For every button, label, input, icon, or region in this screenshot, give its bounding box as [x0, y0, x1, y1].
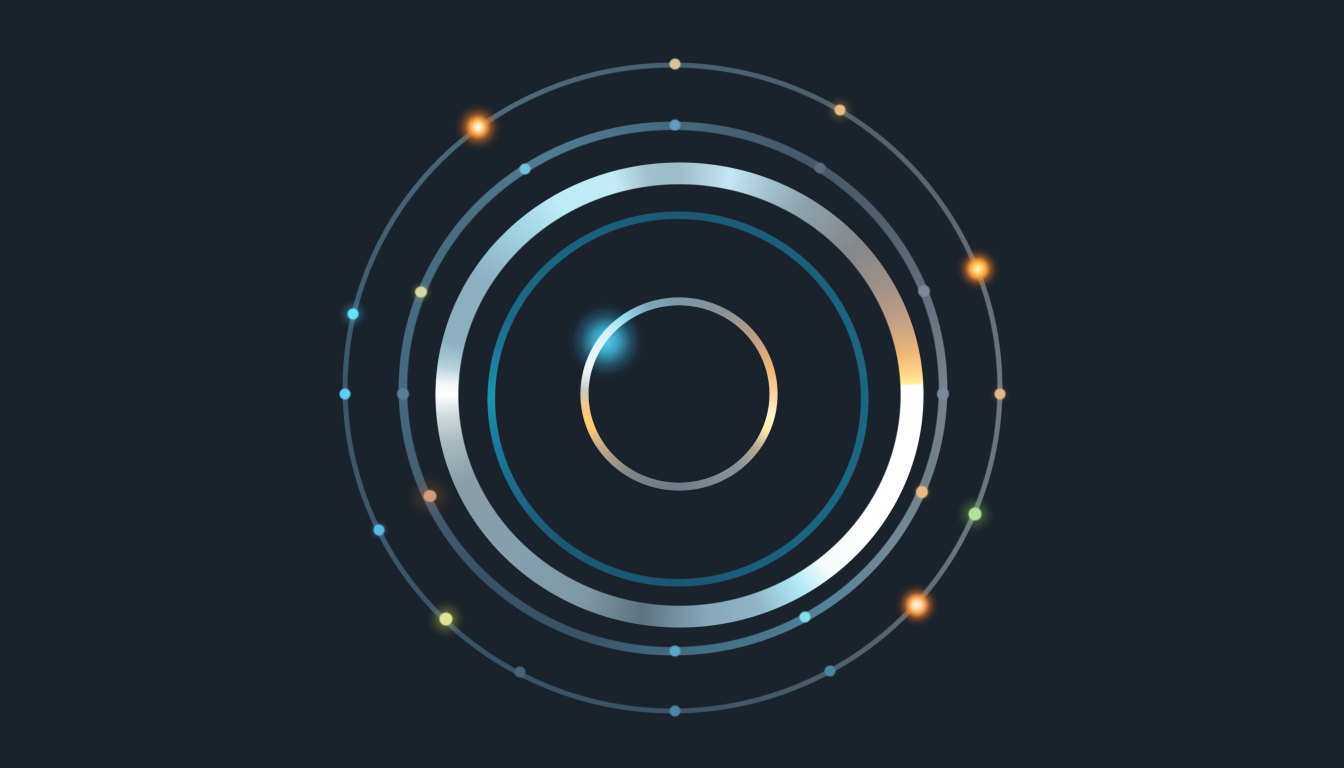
- ring: second orbit: [398, 120, 948, 656]
- node: bottom right blue: [824, 666, 836, 676]
- node: left slate blue: [396, 388, 408, 400]
- node: lower left yellow: [440, 612, 452, 626]
- node: top tan: [670, 58, 680, 70]
- node: right grey: [937, 388, 949, 400]
- ring: inner luminous ring: [580, 297, 778, 491]
- node: upper right tan with glow: [834, 104, 846, 116]
- node: right lower green: [968, 508, 982, 520]
- ring: teal band: [487, 211, 869, 587]
- node: left lower cyan: [374, 524, 384, 536]
- node: bottom left slate: [514, 666, 526, 678]
- node: upper right slate: [814, 162, 826, 174]
- glow: cyan flare behind inner ring: [566, 301, 646, 381]
- node: lower left peach with glow: [423, 490, 436, 502]
- node: left upper bright cyan: [348, 308, 358, 320]
- ring: outer orbit: [342, 62, 1003, 714]
- ring: thick metallic band: [435, 162, 924, 628]
- node: left upper pale yellow: [415, 286, 427, 297]
- node: top blue: [670, 120, 680, 130]
- node: right tan: [994, 388, 1006, 400]
- node: upper left aqua: [520, 163, 530, 174]
- node: lower right orange flare: [895, 583, 939, 627]
- node: right lower tan: [916, 486, 928, 498]
- node: left cyan: [339, 388, 350, 400]
- node: lower right aqua: [800, 612, 810, 622]
- page background: [338, 58, 1008, 717]
- node: right upper orange flare: [956, 247, 1000, 291]
- node: bottom blue: [670, 645, 680, 656]
- node: bottom blue: [670, 706, 680, 716]
- node: right upper grey: [918, 285, 930, 297]
- node: upper left orange flare: [454, 103, 502, 151]
